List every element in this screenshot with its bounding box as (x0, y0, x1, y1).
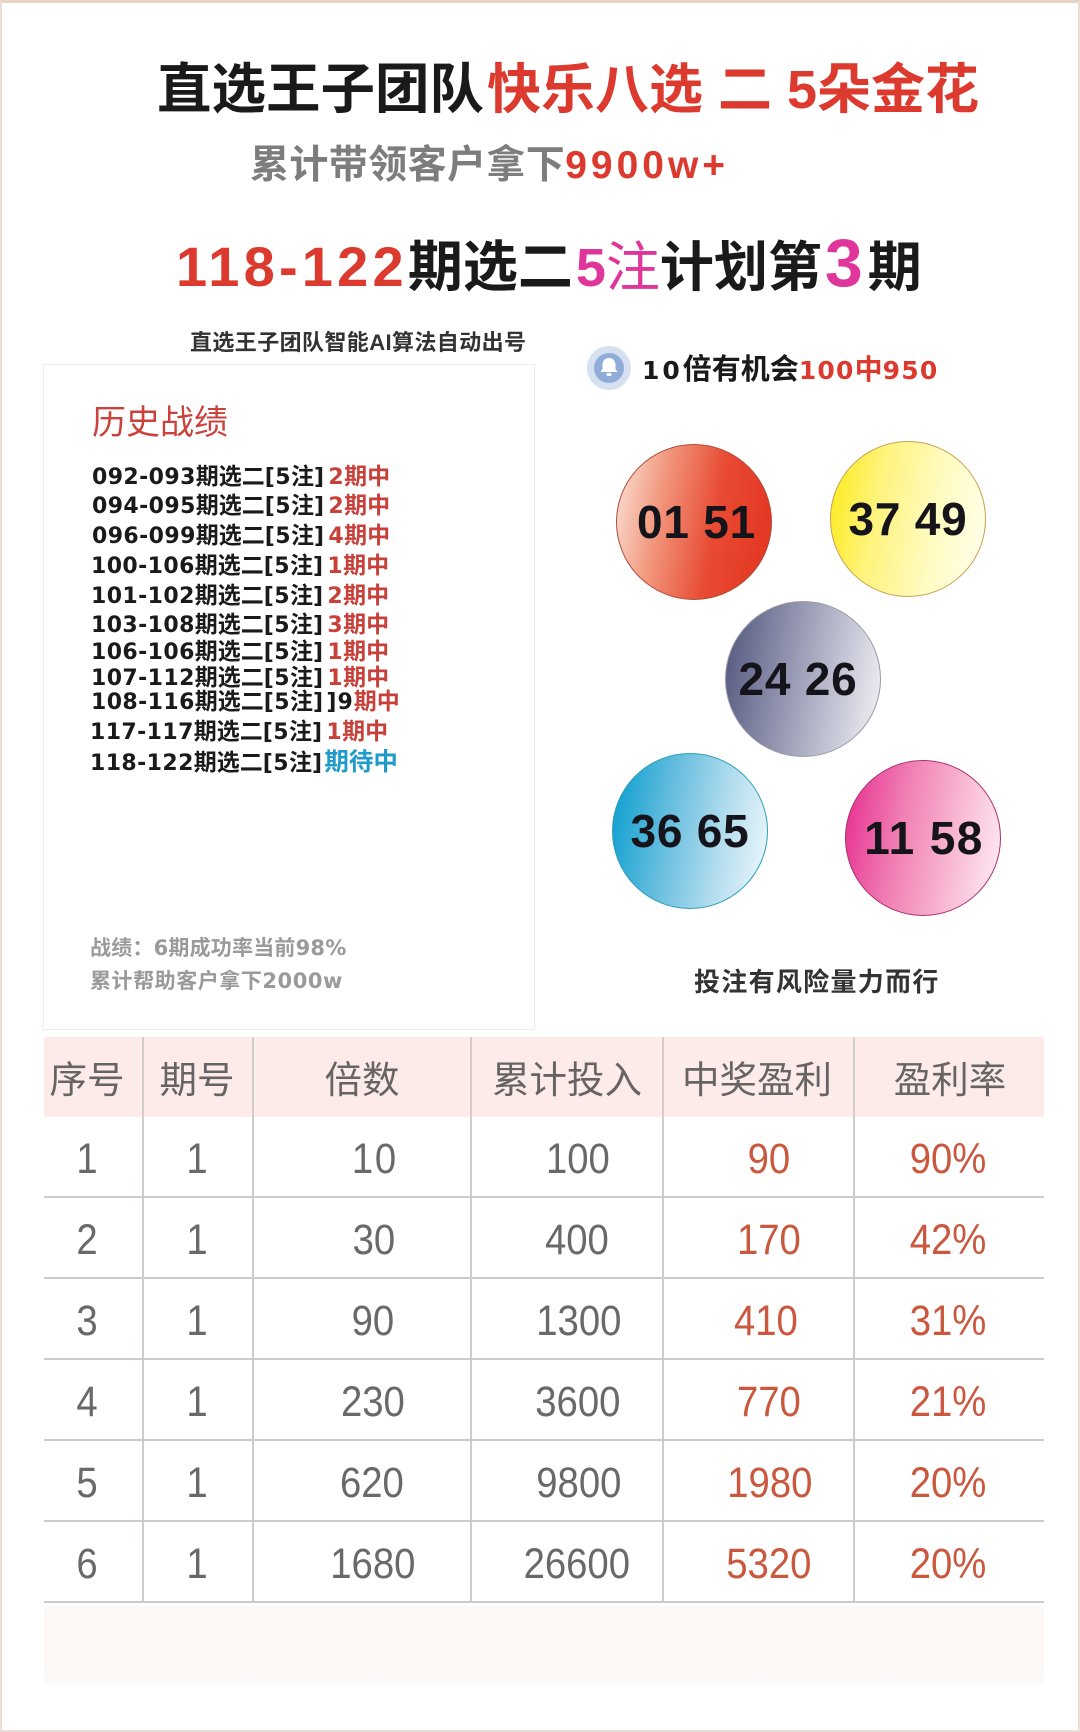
history list: 118-122期选二[5注]期待中 (90, 747, 398, 776)
table row 4: 770 (737, 1378, 801, 1426)
history list: 100-106期选二[5注]1期中 (91, 553, 389, 579)
table row 3: 1300 (536, 1297, 622, 1345)
history list: 107-112期选二[5注]1期中 (91, 665, 389, 691)
ball: 36 65: 36 65 (630, 805, 750, 857)
table row 6: 26600 (524, 1540, 630, 1588)
table row 1: 100 (546, 1135, 610, 1183)
table row 2: 2 (76, 1216, 98, 1264)
table row 6: 5320 (726, 1540, 812, 1588)
table row 2: 42% (910, 1216, 986, 1264)
table row 3: 31% (910, 1297, 986, 1345)
table row 5: 20% (910, 1459, 986, 1507)
table row 4: 3600 (535, 1378, 621, 1426)
table row 4: 21% (910, 1378, 986, 1426)
table row 5: 9800 (536, 1459, 622, 1507)
table header: 序号 (50, 1049, 124, 1104)
table row 3 (76, 1297, 986, 1345)
history list: 108-116期选二[5注]]9期中 (91, 689, 400, 715)
table row 5: 5 (76, 1459, 98, 1507)
table (44, 1037, 1044, 1672)
notice with bell (587, 346, 938, 390)
table header: 中奖盈利 (682, 1049, 832, 1104)
table row 1 (76, 1135, 986, 1183)
table row 2: 400 (545, 1216, 609, 1264)
table header: 倍数 (324, 1049, 400, 1104)
table row 4: 230 (341, 1378, 405, 1426)
history list: 106-106期选二[5注]1期中 (91, 639, 389, 665)
table row 1: 10 (352, 1135, 398, 1183)
history list: 117-117期选二[5注]1期中 (90, 719, 388, 745)
table header: 累计投入 (492, 1049, 642, 1104)
history list: 101-102期选二[5注]2期中 (91, 583, 389, 609)
table row 1: 90 (748, 1135, 790, 1183)
ball: 24 26 (725, 601, 881, 757)
table row 2 (76, 1216, 986, 1264)
table row 6: 20% (910, 1540, 986, 1588)
ball: 37 49 (830, 441, 986, 597)
algorithm note: 直选王子团队智能AI算法自动出号 (190, 330, 526, 355)
ball: 36 65 (612, 753, 768, 909)
ball: 11 58: 11 58 (864, 812, 984, 864)
icon: bell (587, 346, 631, 390)
table row 4: 1 (186, 1378, 208, 1426)
title: 直选王子团队快乐八选 二 5朵金花 (157, 59, 979, 120)
table row 5 (76, 1459, 986, 1507)
table row 5: 1980 (727, 1459, 813, 1507)
panel: history record (43, 364, 535, 1030)
ball: 24 26: 24 26 (738, 653, 858, 705)
record summary (90, 936, 346, 993)
risk note: 投注有风险量力而行 (694, 967, 940, 997)
ball: 01 51: 01 51 (637, 496, 756, 548)
table row 4 (76, 1378, 986, 1426)
table header: 期号 (160, 1049, 234, 1104)
history list: 103-108期选二[5注]3期中 (91, 612, 389, 638)
table footer band (44, 1606, 1044, 1684)
table row 2: 170 (737, 1216, 801, 1264)
table row 2: 30 (353, 1216, 395, 1264)
table header: 盈利率 (894, 1049, 1006, 1104)
table row 6: 1 (186, 1540, 208, 1588)
table row 5: 1 (186, 1459, 208, 1507)
table row 6: 1680 (330, 1540, 416, 1588)
history list: 096-099期选二[5注]4期中 (92, 523, 390, 549)
table row 6: 6 (76, 1540, 98, 1588)
table row 1: 1 (76, 1135, 98, 1183)
record summary: 战绩：6期成功率当前98% (90, 936, 346, 960)
table row 2: 1 (186, 1216, 208, 1264)
table row 1: 90% (910, 1135, 986, 1183)
ball: 11 58 (845, 760, 1001, 916)
table row 6 (76, 1540, 986, 1588)
table row 4: 4 (76, 1378, 98, 1426)
table row 3: 410 (734, 1297, 798, 1345)
table row 1: 1 (186, 1135, 208, 1183)
table row 3: 1 (186, 1297, 208, 1345)
history list: 094-095期选二[5注]2期中 (92, 493, 390, 519)
panel heading: 历史战绩 (92, 404, 228, 442)
record summary: 累计帮助客户拿下2000w (90, 969, 343, 993)
subtitle: 累计带领客户拿下9900w+ (250, 144, 729, 187)
notice text: 10倍有机会100中950 (642, 352, 938, 386)
table header background (44, 1037, 1044, 1117)
history list: 092-093期选二[5注]2期中 (92, 464, 390, 490)
table row 3: 3 (76, 1297, 98, 1345)
ball: 01 51 (616, 444, 772, 600)
ball: 37 49: 37 49 (848, 493, 968, 545)
history list (90, 464, 400, 776)
table row 5: 620 (340, 1459, 404, 1507)
table header (50, 1049, 1006, 1104)
table row 3: 90 (352, 1297, 394, 1345)
plan heading: 118-122期选二5注计划第3期 (176, 225, 922, 301)
